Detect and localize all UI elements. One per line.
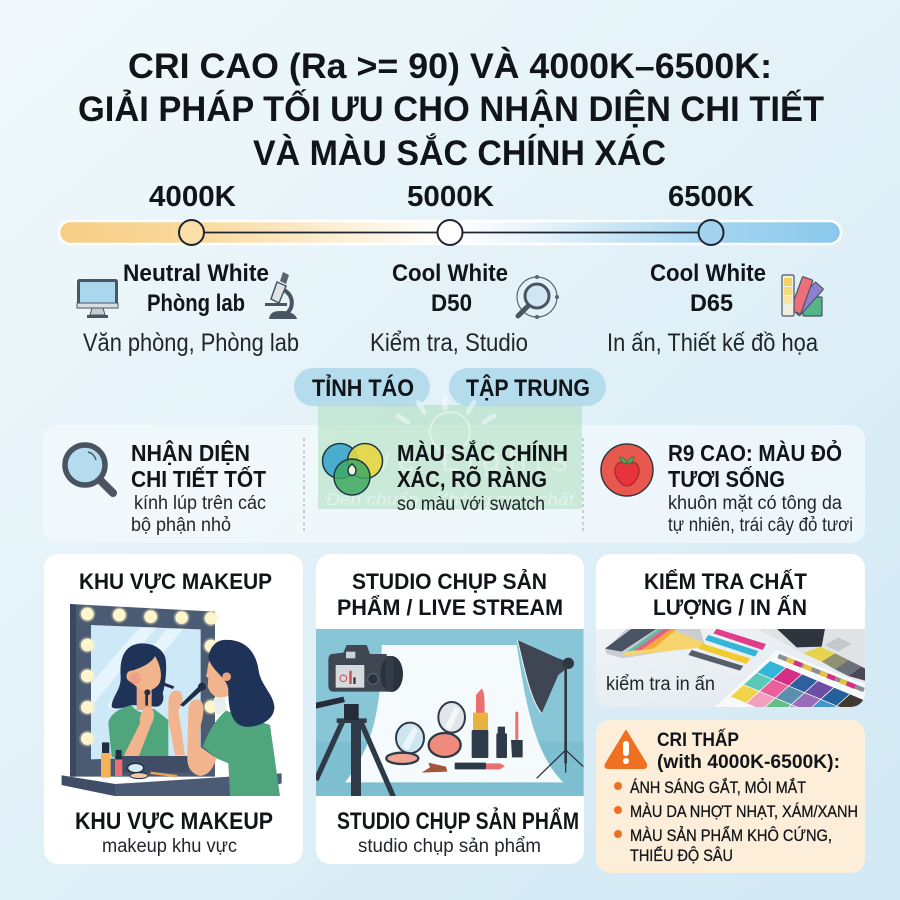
usage: Kiểm tra, Studio: [370, 329, 528, 357]
icon: inspection magnifier: [517, 275, 559, 319]
column: 5000K cool white D50: D50: [431, 290, 472, 317]
title: [78, 46, 824, 173]
benefit: detail recognition: [65, 439, 266, 536]
strips: [713, 629, 766, 650]
caption: kiểm tra in ấn: [606, 674, 715, 695]
pill: focus: [449, 368, 606, 406]
colour bar strip: [778, 656, 864, 690]
benefit: high R9 red: tự nhiên, trái cây đỏ tươi: [668, 515, 853, 536]
benefit: accurate colour: XÁC, RÕ RÀNG: [397, 465, 547, 492]
icon: colour venn diagram: [322, 444, 382, 495]
heading: STUDIO CHỤP SẢN: [352, 569, 547, 594]
caption heading: KHU VỰC MAKEUP: [75, 808, 273, 835]
products: [101, 753, 111, 778]
caption: studio chụp sản phẩm: [358, 836, 541, 857]
colour patches: [730, 661, 864, 707]
heading: MÀU SẮC CHÍNH: [397, 439, 568, 466]
description: kính lúp trên các: [134, 493, 266, 514]
temperature labels: 4000K: [149, 181, 236, 213]
title: CRI CAO (Ra >= 90) VÀ 4000K–6500K:: [128, 46, 772, 86]
watermark: [318, 398, 582, 509]
softbox: [564, 668, 567, 764]
usage: In ấn, Thiết kế đồ họa: [607, 329, 818, 357]
reflection: [112, 643, 166, 709]
illustration: woman doing makeup at a mirror: [62, 604, 282, 796]
icon: microscope: [265, 272, 297, 319]
temperature labels: 6500K: [668, 181, 754, 213]
benefit: detail recognition: bộ phận nhỏ: [131, 515, 231, 536]
top right chart and device: [757, 629, 865, 682]
usage: Văn phòng, Phòng lab: [83, 329, 299, 357]
icon: colour swatch fan: [782, 275, 824, 316]
panel dividers: [304, 438, 583, 532]
tripod: [316, 720, 393, 797]
watermark: Live Lights: [332, 441, 568, 479]
pill: focus: TẬP TRUNG: [466, 374, 590, 402]
warning list: [614, 778, 858, 865]
heading: R9 CAO: MÀU ĐỎ: [668, 438, 842, 466]
foreground woman: [206, 660, 232, 698]
heading: Cool White: [392, 260, 508, 287]
panel: key benefits: [43, 425, 865, 543]
watermark: Đèn chuẩn - Không gian chất: [326, 490, 575, 509]
icon: computer monitor: [77, 279, 118, 318]
panel: low CRI warning: (with 4000K-6500K):: [657, 752, 840, 773]
panel: low CRI warning: [596, 720, 865, 873]
warning list: THIẾU ĐỘ SÂU: [630, 846, 733, 865]
icon: magnifying glass: [65, 445, 113, 493]
camera: [328, 645, 387, 692]
panel: product studio: [316, 554, 584, 864]
counter: [115, 756, 188, 773]
benefit: high R9 red: TƯƠI SỐNG: [668, 465, 785, 492]
card background: [44, 554, 303, 864]
pill: alert: TỈNH TÁO: [312, 373, 414, 402]
column: 4000K neutral white: Phòng lab: [147, 290, 245, 317]
panel: quality inspection and printing: LƯỢNG / IN ẤN: [653, 595, 807, 620]
column: 5000K cool white D50: [370, 260, 559, 357]
card background: [596, 720, 865, 873]
icon: red apple badge: [601, 444, 653, 496]
card background: [316, 554, 584, 864]
heading: NHẬN DIỆN: [131, 439, 250, 466]
title: GIẢI PHÁP TỐI ƯU CHO NHẬN DIỆN CHI TIẾT: [78, 89, 824, 129]
heading: KHU VỰC MAKEUP: [79, 569, 272, 594]
panel: quality inspection and printing: [596, 554, 865, 707]
column: 4000K neutral white: [77, 260, 299, 357]
heading: Cool White: [650, 260, 766, 287]
warning list: MÀU SẢN PHẨM KHÔ CỨNG,: [630, 826, 832, 845]
warning list: MÀU DA NHỢT NHẠT, XÁM/XANH: [630, 802, 858, 821]
heading: CRI THẤP: [657, 729, 739, 751]
panel: makeup area: [44, 554, 303, 864]
panel: product studio: PHẨM / LIVE STREAM: [337, 595, 563, 620]
caption heading: STUDIO CHỤP SẢN PHẨM: [337, 806, 579, 835]
pill: alert: [294, 368, 430, 406]
illustration: product photo set: [316, 628, 584, 797]
card background: [596, 554, 865, 707]
heading: KIỂM TRA CHẤT: [644, 569, 808, 594]
icon: warning triangle: [605, 731, 646, 768]
description: so màu với swatch: [397, 494, 545, 515]
benefit: detail recognition: CHI TIẾT TỐT: [131, 465, 266, 492]
caption: makeup khu vực: [102, 836, 237, 857]
swatch fan: [605, 629, 705, 658]
benefit: accurate colour: [322, 439, 568, 515]
temperature labels: [149, 181, 754, 213]
title: VÀ MÀU SẮC CHÍNH XÁC: [253, 133, 666, 173]
temperature labels: 5000K: [407, 181, 494, 213]
column: 6500K cool white D65: [607, 260, 824, 357]
bar line and markers: [179, 220, 724, 245]
description: khuôn mặt có tông da: [668, 493, 842, 514]
chart paper: [712, 650, 867, 710]
column: 6500K cool white D65: D65: [690, 290, 733, 317]
heading: Neutral White: [123, 260, 269, 287]
colour temperature scale: [59, 181, 841, 245]
warning list: ÁNH SÁNG GẮT, MỎI MẮT: [630, 778, 806, 797]
illustration: colour swatches and print charts: [596, 629, 865, 707]
cosmetics: [396, 723, 424, 753]
gradient bar: [59, 221, 841, 244]
benefit: high R9 red: [601, 438, 853, 536]
